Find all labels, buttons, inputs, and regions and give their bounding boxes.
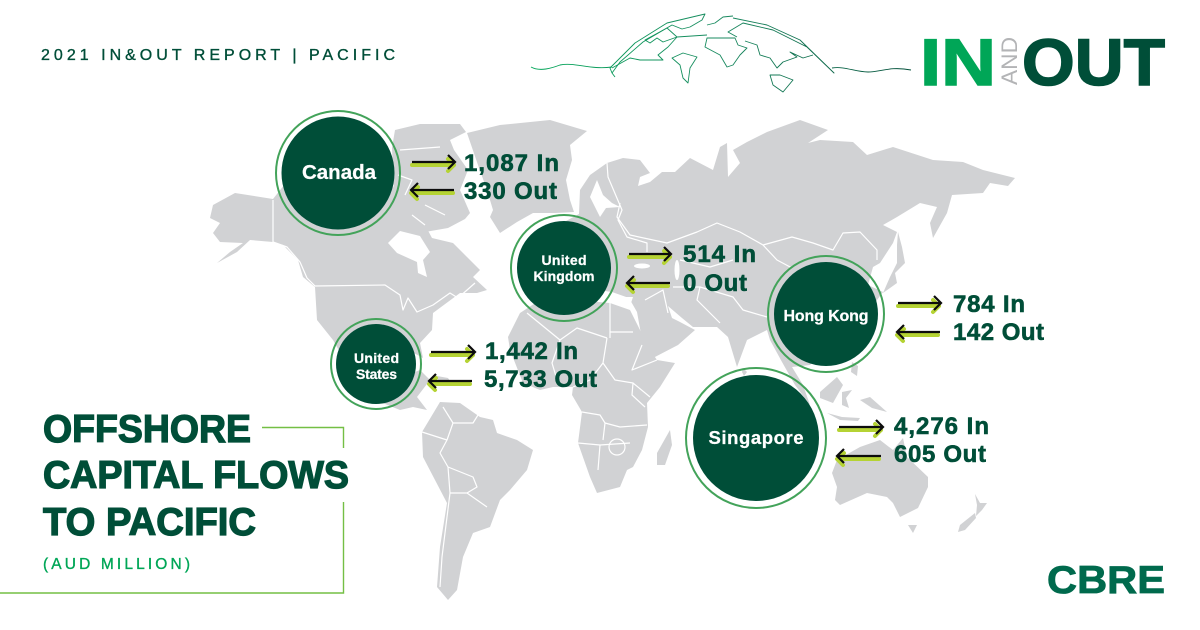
callout: Singapore: Singapore [708, 427, 804, 448]
callout: United States: 1,442 In [485, 338, 578, 365]
callout: United Kingdom: Kingdom [534, 268, 594, 284]
callout: United States: United [354, 350, 399, 366]
map: North America [210, 165, 487, 410]
map: Australia [832, 438, 928, 517]
title block [43, 408, 349, 573]
callout: United Kingdom [511, 215, 756, 321]
title block: TO PACIFIC [43, 501, 256, 544]
map: Eurasia [522, 120, 1015, 405]
In and Out logo [920, 25, 1165, 99]
callout: Singapore [686, 368, 989, 508]
callout: United States: 5,733 Out [484, 366, 597, 393]
map: country borders [273, 147, 877, 587]
title block: (AUD MILLION) [43, 556, 190, 573]
In and Out logo: IN [920, 25, 996, 99]
callout: United States [331, 319, 597, 409]
In and Out logo: OUT [1022, 25, 1165, 99]
callout: Hong Kong [768, 256, 1044, 372]
map: islands [437, 232, 987, 533]
title frame line [0, 428, 344, 593]
map: South America [422, 402, 533, 600]
callout: Singapore: 4,276 In [894, 413, 989, 440]
callout: Canada: 1,087 In [464, 150, 559, 177]
callout: Hong Kong: Hong Kong [784, 308, 868, 325]
callout: Canada [276, 111, 559, 235]
callout: Canada: Canada [302, 161, 377, 184]
callout: Hong Kong: 142 Out [953, 319, 1044, 346]
callout: Singapore: 605 Out [894, 441, 986, 468]
CBRE logo: CBRE [1047, 559, 1165, 602]
globe line art [531, 14, 911, 92]
title block: OFFSHORE [43, 408, 251, 451]
map: Arctic islands [392, 124, 470, 232]
callout: United States: States [356, 366, 397, 382]
callout: United Kingdom: United [542, 252, 586, 268]
callout: United Kingdom: 514 In [683, 241, 756, 268]
map: Africa [508, 300, 675, 493]
title block: CAPITAL FLOWS [43, 454, 349, 497]
callout: United Kingdom: 0 Out [683, 270, 747, 297]
callout: Hong Kong: 784 In [953, 291, 1025, 318]
map: inland seas [590, 180, 680, 303]
world map [210, 120, 1015, 600]
In and Out logo: AND [997, 37, 1022, 85]
callout: Canada: 330 Out [464, 178, 557, 205]
map: Hudson Bay [388, 231, 430, 277]
map: Greenland [467, 120, 587, 233]
report header: 2021 IN&OUT REPORT | PACIFIC [41, 47, 395, 64]
